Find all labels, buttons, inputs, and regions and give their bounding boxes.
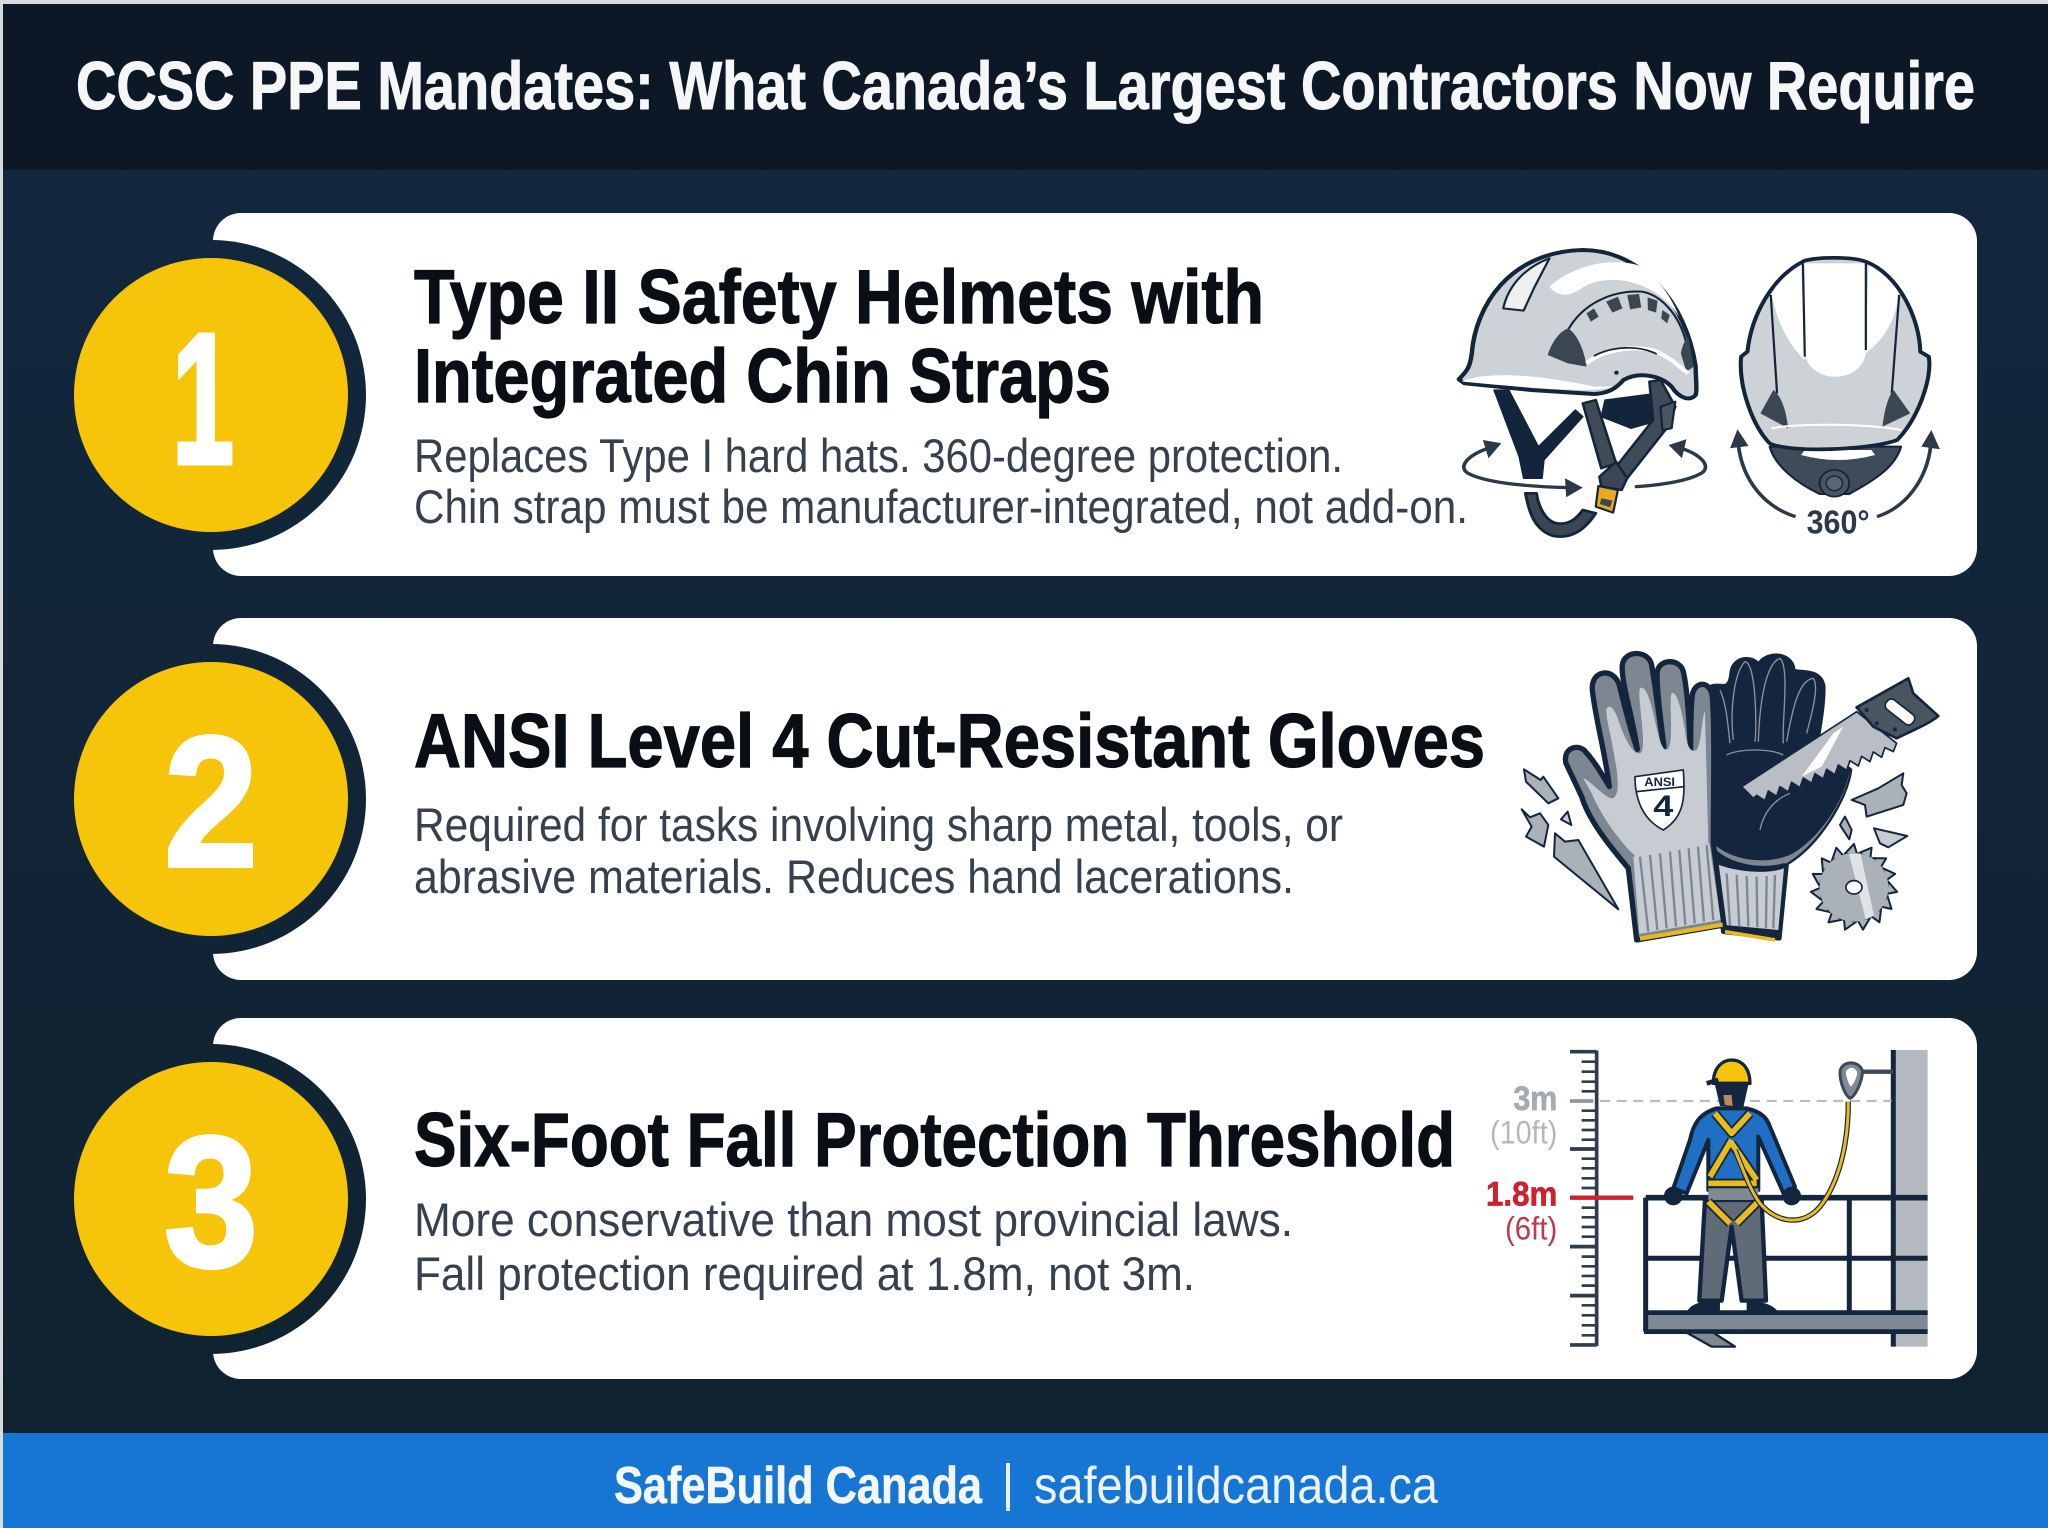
icon: side shell	[1459, 250, 1696, 398]
icon: metal shards	[1522, 769, 1907, 909]
panel: item 1 helmets	[56, 213, 1977, 576]
icon: height ruler	[1570, 1051, 1597, 1346]
label: 1.8m: (6ft)	[1505, 1210, 1557, 1246]
description 1	[414, 429, 1468, 533]
icon: ANSI 4 badge: 4	[1653, 790, 1674, 823]
description 1: Chin strap must be manufacturer-integrated, not add-on.	[414, 480, 1468, 533]
heading 1: Type II Safety Helmets with	[414, 255, 1264, 340]
icon: circular saw blade	[1810, 844, 1898, 932]
icon: worker on scaffold with height ruler	[1486, 1050, 1928, 1347]
icon: 3m dashed line	[1570, 1095, 1593, 1106]
icon: ANSI 4 badge: ANSI	[1644, 775, 1675, 789]
badge 3: 3	[164, 1099, 258, 1306]
icon: scaffold	[1644, 1198, 1928, 1347]
footer text: SafeBuild Canada	[614, 1457, 983, 1515]
description 1: Replaces Type I hard hats. 360-degree protection.	[414, 429, 1343, 482]
icon: worker	[1664, 1060, 1801, 1313]
heading 3: Six-Foot Fall Protection Threshold	[414, 1098, 1455, 1183]
icon: helmet straps	[1494, 380, 1675, 537]
label: 1.8m	[1486, 1176, 1557, 1246]
icon: light glove	[1565, 653, 1724, 940]
badge 1: 1	[172, 296, 234, 503]
icon: dark glove	[1712, 656, 1850, 940]
description 3: More conservative than most provincial laws.	[414, 1193, 1293, 1246]
icon: harness	[1708, 1113, 1758, 1223]
description 2: abrasive materials. Reduces hand lacerations.	[414, 850, 1294, 903]
description 2	[414, 798, 1343, 903]
icon: wall	[1893, 1050, 1928, 1347]
card 2 background	[213, 618, 1977, 980]
description 2: Required for tasks involving sharp metal, tools, or	[414, 798, 1343, 851]
icon: front view helmet	[1741, 258, 1929, 497]
description 3: Fall protection required at 1.8m, not 3m.	[414, 1247, 1195, 1300]
label: 3m: 3m	[1513, 1080, 1557, 1118]
footer text: safebuildcanada.ca	[1034, 1457, 1438, 1515]
label: 3m: (10ft)	[1490, 1114, 1557, 1150]
card 1 background	[213, 213, 1977, 576]
footer band	[3, 1433, 2048, 1528]
icon: gloves, saw, blade and shards	[1522, 653, 1938, 940]
footer text	[614, 1457, 1438, 1515]
icon: rotation arrows	[1464, 439, 1705, 497]
badge 3	[56, 1044, 366, 1354]
icon: red 1.8m line	[1570, 1191, 1633, 1204]
panel: item 2 gloves	[56, 618, 1977, 980]
badge 1	[56, 240, 366, 550]
label: 3m	[1490, 1080, 1557, 1150]
icon: 360 arrows: 360°	[1807, 504, 1870, 541]
description 3	[414, 1193, 1293, 1300]
icon: 360 arrows	[1730, 429, 1940, 541]
badge 2	[56, 644, 366, 954]
icon: lanyard and anchor	[1735, 1063, 1893, 1220]
heading 1: Integrated Chin Straps	[414, 334, 1111, 419]
heading 2: ANSI Level 4 Cut-Resistant Gloves	[414, 699, 1485, 784]
label: 1.8m: 1.8m	[1486, 1176, 1557, 1214]
icon: ANSI 4 badge	[1635, 770, 1684, 830]
card 3 background	[213, 1018, 1977, 1379]
heading 1	[414, 255, 1264, 419]
badge 2: 2	[164, 699, 258, 906]
header band with title	[3, 4, 2048, 170]
panel: item 3 fall protection	[56, 1018, 1977, 1379]
icon: helmet side and front views	[1459, 250, 1940, 541]
icon: hand saw	[1742, 678, 1938, 801]
